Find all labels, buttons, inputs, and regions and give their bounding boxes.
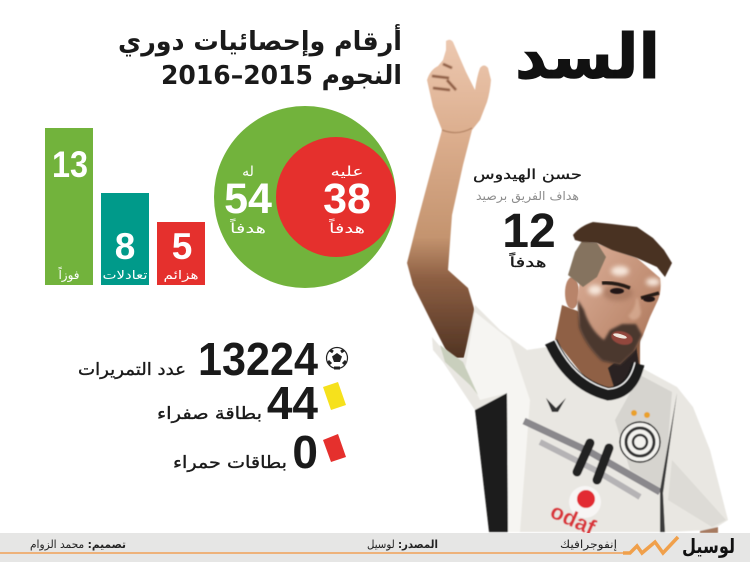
bar: wins: 13 bbox=[52, 144, 88, 185]
logo mark bbox=[623, 537, 678, 553]
beard bbox=[578, 300, 642, 365]
bar: draws: 8 bbox=[115, 226, 135, 267]
infographic label: إنفوجرافيك bbox=[560, 538, 617, 551]
stat: yellow cards: بطاقة صفراء bbox=[157, 404, 262, 424]
stat: passes: 13224 bbox=[198, 333, 318, 385]
team title: السد bbox=[515, 20, 660, 93]
goals for bbox=[224, 164, 272, 237]
heading: النجوم 2015–2016 bbox=[161, 61, 402, 91]
logo text: لوسيل bbox=[682, 534, 735, 558]
bar: draws bbox=[101, 193, 149, 285]
credit: تصميم: محمد الزوام bbox=[30, 538, 126, 551]
black side panel bbox=[475, 393, 508, 532]
bar: wins bbox=[45, 128, 93, 285]
player goals label: هدفاً bbox=[509, 252, 546, 271]
player subtitle: هداف الفريق برصيد bbox=[476, 189, 579, 204]
bar: losses bbox=[157, 222, 205, 285]
ear bbox=[565, 277, 579, 309]
goals against: هدفاً bbox=[328, 218, 365, 237]
brand logo bbox=[546, 398, 566, 412]
mouth bbox=[610, 329, 634, 347]
sponsor: odaf bbox=[547, 498, 600, 540]
goals against bbox=[323, 164, 371, 237]
shirt number bbox=[577, 443, 609, 480]
bar: wins: فوزاً bbox=[58, 266, 80, 283]
stat: passes: عدد التمريرات bbox=[78, 360, 186, 380]
stars bbox=[631, 410, 650, 418]
icon: yellow card bbox=[323, 382, 346, 410]
icon: football bbox=[326, 348, 348, 368]
bar: draws: تعادلات bbox=[102, 268, 148, 282]
goals for: 54 bbox=[224, 175, 272, 223]
jersey bbox=[432, 305, 728, 540]
stat: red cards bbox=[173, 426, 318, 478]
goals for: له bbox=[242, 164, 254, 180]
skin highlights bbox=[588, 266, 660, 295]
collar bbox=[551, 342, 638, 394]
nose bbox=[628, 298, 641, 320]
shaved side bbox=[568, 241, 606, 287]
goals circles bbox=[214, 106, 396, 288]
player illustration bbox=[407, 40, 728, 540]
stat: yellow cards bbox=[157, 377, 318, 429]
brows and eyes bbox=[602, 283, 659, 298]
stat: red cards: 0 bbox=[292, 426, 318, 478]
eye shadows bbox=[603, 285, 633, 301]
neck bbox=[555, 305, 640, 392]
bar chart: results bbox=[45, 128, 205, 285]
icon: red card bbox=[323, 434, 346, 462]
player goals number: 12 bbox=[502, 205, 556, 258]
bar: losses: هزائم bbox=[164, 268, 198, 283]
face bbox=[577, 243, 661, 364]
arm and hand bbox=[407, 40, 491, 358]
goals against: 38 bbox=[323, 175, 371, 223]
forearm below sleeve bbox=[700, 527, 718, 533]
stat: passes bbox=[78, 333, 318, 385]
footer bbox=[0, 533, 750, 562]
stat: yellow cards: 44 bbox=[267, 377, 318, 429]
stat: red cards: بطاقات حمراء bbox=[173, 453, 287, 473]
player name: حسن الهيدوس bbox=[473, 167, 582, 183]
heading bbox=[118, 24, 402, 91]
goals for: هدفاً bbox=[229, 218, 266, 237]
source: المصدر: لوسيل bbox=[367, 538, 438, 551]
heading: أرقام وإحصائيات دوري bbox=[118, 24, 402, 57]
crest bbox=[620, 422, 660, 462]
hair bbox=[573, 222, 672, 277]
chest stripes bbox=[524, 421, 660, 492]
goals against: عليه bbox=[330, 164, 364, 180]
bar: losses: 5 bbox=[172, 226, 192, 267]
head bbox=[565, 222, 672, 365]
